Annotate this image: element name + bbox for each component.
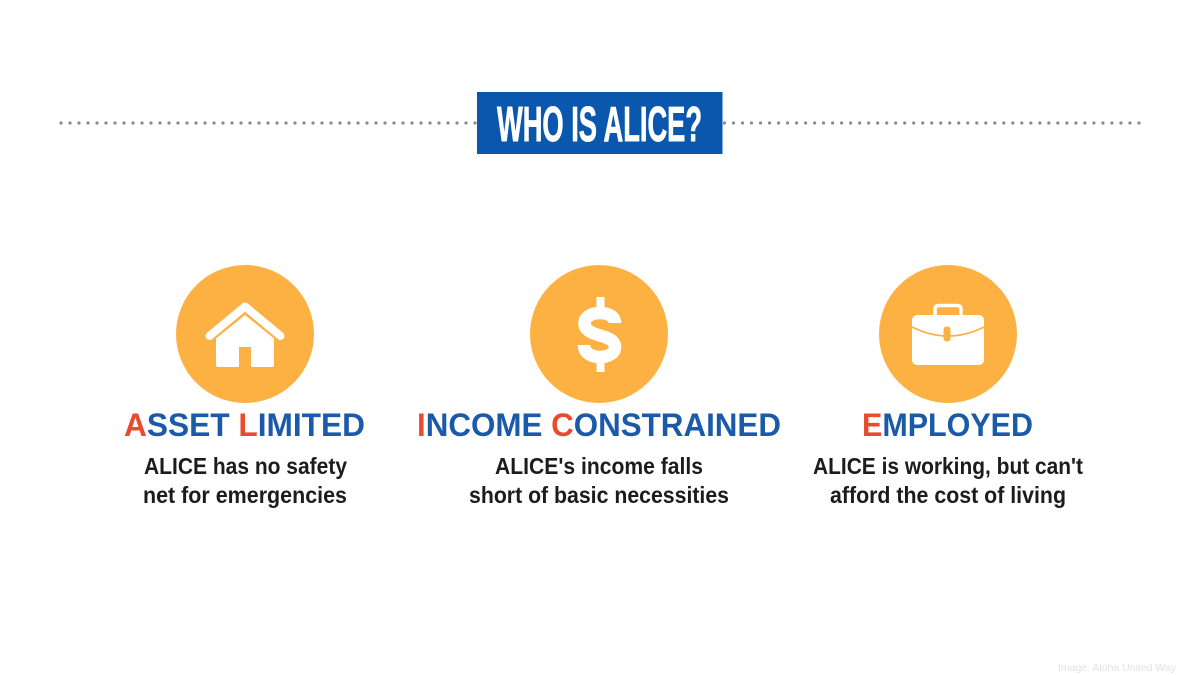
- panel: asset limited: [124, 265, 365, 508]
- text: income constrained description: [469, 453, 729, 508]
- text: asset limited description: net for emergencies: [143, 482, 347, 508]
- text: income constrained description: short of basic necessities: [469, 482, 729, 508]
- heading: income constrained: INCOME CONSTRAINED: [417, 407, 781, 443]
- text: employed description: ALICE is working, but can't: [813, 453, 1083, 479]
- panel: employed: [813, 265, 1083, 508]
- text: employed description: afford the cost of living: [830, 482, 1066, 508]
- text: employed description: [813, 453, 1083, 508]
- icon: briefcase: [879, 265, 1017, 403]
- text: asset limited description: [143, 453, 347, 508]
- image credit: Image: Aloha United Way: [1058, 662, 1177, 674]
- icon: dollar sign: [530, 265, 668, 403]
- title banner: [477, 92, 722, 154]
- text: asset limited description: ALICE has no safety: [144, 453, 347, 479]
- heading: employed: EMPLOYED: [862, 407, 1033, 443]
- icon: house: [176, 265, 314, 403]
- text: income constrained description: ALICE's income falls: [495, 453, 703, 479]
- heading: asset limited: ASSET LIMITED: [124, 407, 365, 443]
- title banner: WHO IS ALICE?: [497, 98, 702, 152]
- panel: income constrained: [417, 265, 781, 508]
